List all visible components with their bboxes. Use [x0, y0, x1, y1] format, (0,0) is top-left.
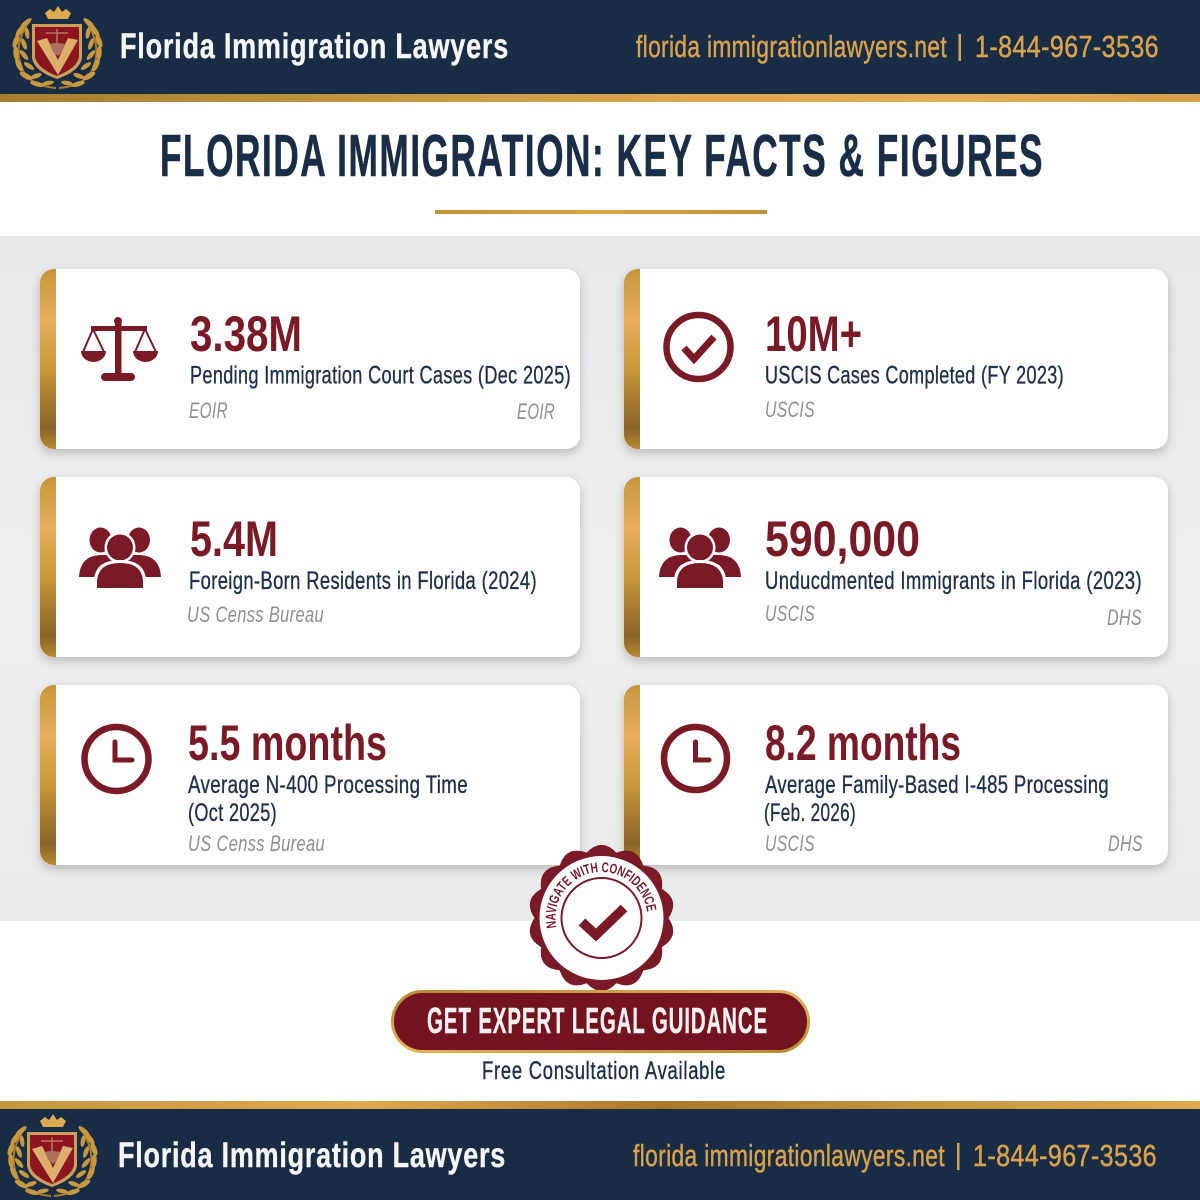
- gray panel background: [0, 236, 1200, 921]
- seal text: NAVIGATE WITH CONFIDENCE: [546, 862, 656, 928]
- label line 2: (Oct 2025): [188, 799, 277, 827]
- icon: clock: [84, 727, 148, 791]
- header contact: 1-844-967-3536: [975, 29, 1159, 64]
- footer logo: [6, 1114, 99, 1196]
- icon: check circle: [666, 315, 730, 379]
- title underline: [435, 210, 767, 214]
- header contact: florida immigrationlawyers.net: [636, 29, 947, 64]
- card: undocumented immigrants: [624, 477, 1168, 657]
- source: US Censs Bureau: [187, 602, 324, 627]
- icon: clock: [664, 727, 727, 790]
- value: 5.4M: [190, 511, 278, 567]
- source right: DHS: [1107, 605, 1142, 630]
- footer contact: 1-844-967-3536: [973, 1138, 1157, 1173]
- label: Pending Immigration Court Cases (Dec 2025): [190, 362, 571, 390]
- source: USCIS: [765, 831, 815, 856]
- header firm name: Florida Immigration Lawyers: [120, 27, 509, 66]
- seal: navigate with confidence: [530, 844, 674, 990]
- label: Foreign-Born Residents in Florida (2024): [189, 567, 537, 595]
- value: 590,000: [765, 511, 920, 567]
- footer firm name: Florida Immigration Lawyers: [118, 1136, 506, 1175]
- label: Average N-400 Processing Time: [188, 771, 468, 799]
- icon: people: [79, 528, 161, 588]
- header bar: [0, 0, 1200, 102]
- card: I-485 processing time: [624, 685, 1168, 865]
- label line 2: (Feb. 2026): [764, 799, 856, 827]
- header logo: [11, 6, 104, 88]
- source: USCIS: [765, 601, 815, 626]
- value: 5.5 months: [188, 715, 387, 771]
- source: USCIS: [765, 397, 815, 422]
- card: pending court cases: [40, 269, 580, 449]
- label: USCIS Cases Completed (FY 2023): [765, 362, 1064, 390]
- source: EOIR: [189, 398, 228, 423]
- card: USCIS cases completed: [624, 269, 1168, 449]
- value: 10M+: [765, 306, 862, 362]
- call to action button: [392, 992, 808, 1052]
- footer bar: [0, 1101, 1200, 1200]
- icon: people: [659, 528, 741, 588]
- call to action button: GET EXPERT LEGAL GUIDANCE: [427, 1000, 768, 1041]
- value: 8.2 months: [765, 715, 961, 771]
- seal check mark: [582, 908, 624, 935]
- source right: EOIR: [517, 399, 555, 424]
- call to action subtext: Free Consultation Available: [482, 1057, 726, 1085]
- icon: scales: [81, 317, 158, 381]
- source right: DHS: [1108, 831, 1143, 856]
- source: US Censs Bureau: [188, 831, 325, 856]
- card: foreign-born residents: [40, 477, 580, 657]
- card: N-400 processing time: [40, 685, 580, 865]
- footer contact: florida immigrationlawyers.net: [633, 1138, 945, 1173]
- value: 3.38M: [190, 306, 302, 362]
